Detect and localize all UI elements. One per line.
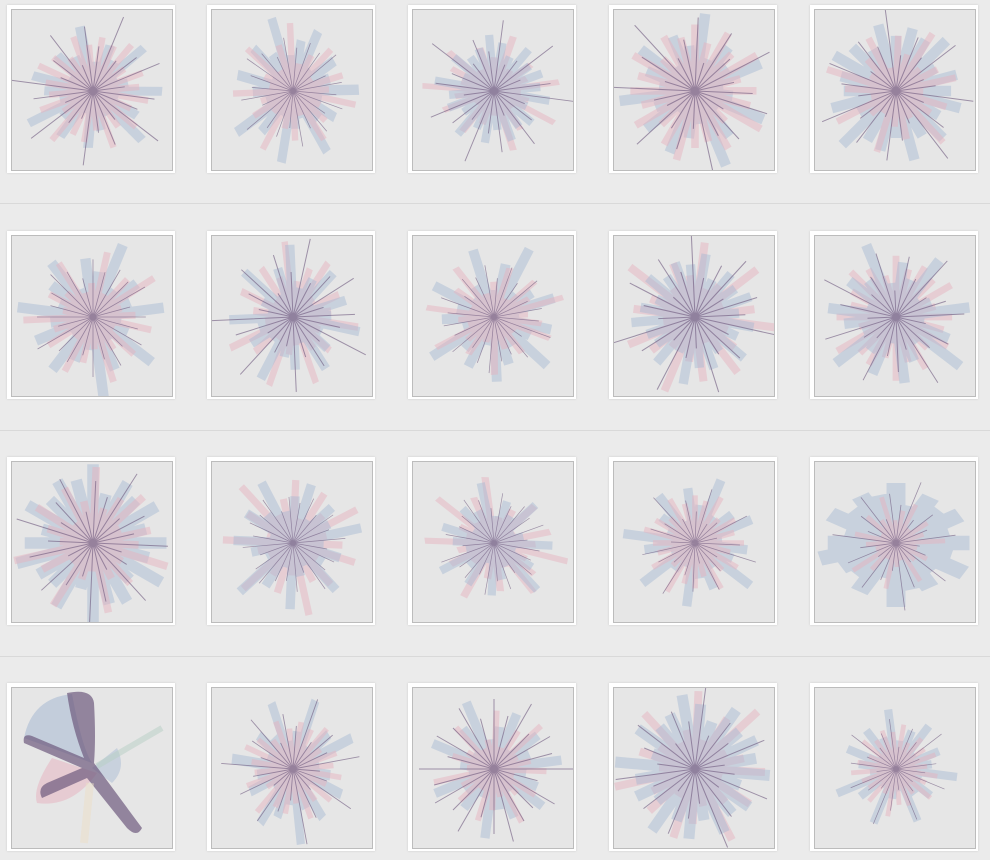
- chart tile 7: [207, 231, 375, 399]
- chart tile 18: [408, 683, 576, 851]
- chart tile 11: [7, 457, 175, 625]
- chart tile 8: [408, 231, 576, 399]
- chart tile 2: [207, 5, 375, 173]
- chart tile 6: [7, 231, 175, 399]
- chart tile 19: [609, 683, 777, 851]
- chart tile 20: [810, 683, 978, 851]
- chart tile 12: [207, 457, 375, 625]
- chart tile 5: [810, 5, 978, 173]
- chart tile 13: [408, 457, 576, 625]
- chart tile 14: [609, 457, 777, 625]
- chart tile 10: [810, 231, 978, 399]
- chart tile 3: [408, 5, 576, 173]
- chart tile 4: [609, 5, 777, 173]
- chart tile 9: [609, 231, 777, 399]
- chart tile 17: [207, 683, 375, 851]
- chart tile 16 (petal chart): [7, 683, 175, 851]
- chart tile 1: [7, 5, 175, 173]
- chart tile 15: [810, 457, 978, 625]
